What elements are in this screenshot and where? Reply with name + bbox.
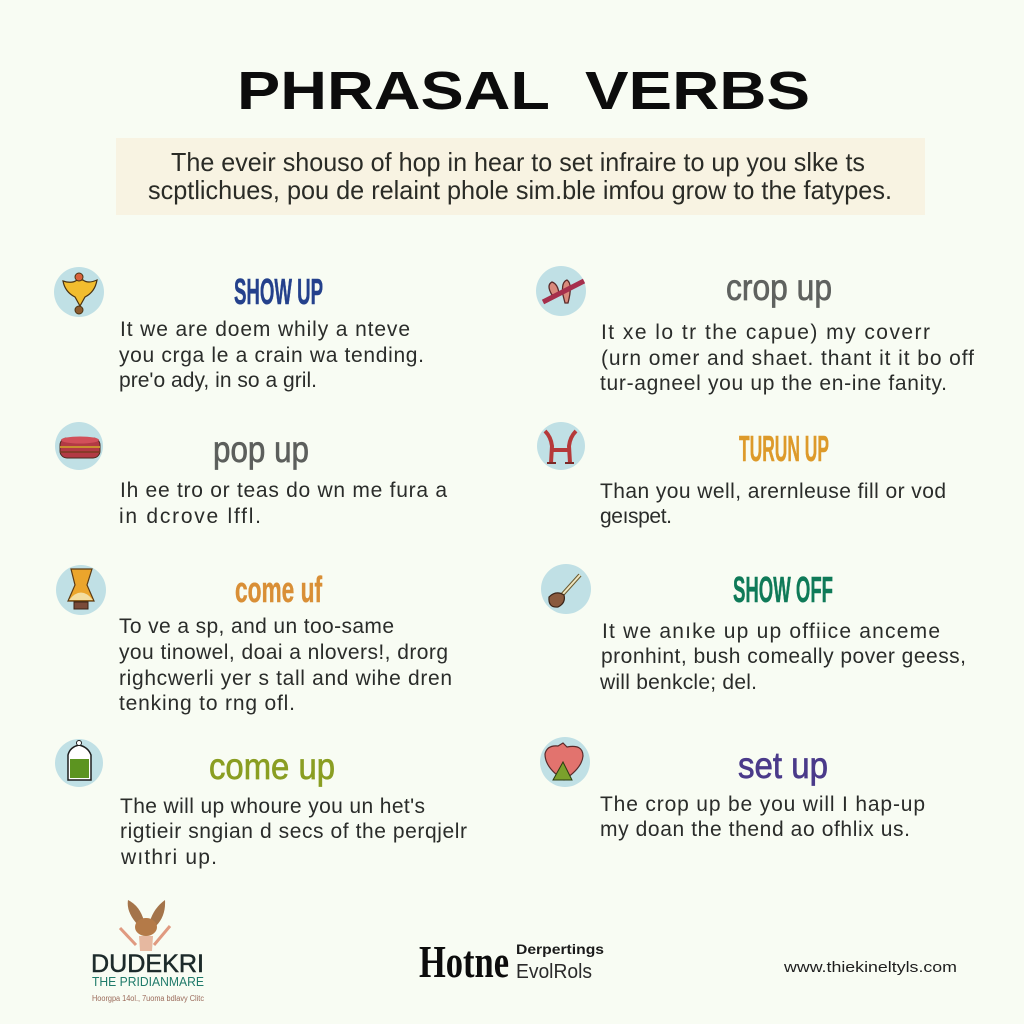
title: PHRASAL: [237, 61, 550, 121]
heading: show off: SHOW OFF: [733, 569, 833, 610]
intro panel: scptlichues, pou de relaint phole sim.ble imfou grow to the fatypes.: [148, 175, 892, 205]
description: show off: [599, 620, 966, 694]
heading: come up: come up: [209, 746, 335, 787]
description: crop up: It xe lo tr the capue) my coverr: [601, 321, 930, 344]
description: turun up: geıspet.: [600, 505, 672, 528]
description: show up: [119, 318, 424, 392]
description: come up: [120, 795, 467, 869]
description: come up: The will up whoure you un het's: [120, 795, 425, 818]
description: come uf: tenking to rng ofl.: [119, 692, 295, 715]
description: come uf: you tinowel, doai a nlovers!, drorg: [119, 641, 448, 664]
intro panel: [116, 138, 925, 215]
heading: come uf: come uf: [235, 569, 323, 610]
description: show off: will benkcle; del.: [599, 671, 757, 694]
description: pop up: [119, 479, 447, 528]
description: come up: wıthri up.: [120, 846, 217, 869]
logo: dudekri: [91, 900, 204, 1003]
panel: come uf: [56, 565, 452, 715]
description: pop up: Ih ee tro or teas do wn me fura a: [120, 479, 447, 502]
icon: long-eared mascot: [120, 900, 170, 951]
description: come uf: [119, 615, 452, 715]
description: show up: pre'o ady, in so a gril.: [119, 369, 317, 392]
footer brand: hotne: Hotne: [419, 936, 509, 987]
description: show up: It we are doem whily a nteve: [120, 318, 410, 341]
logo subtitle: THE PRIDIANMARE: [92, 975, 204, 989]
panel: pop up: [55, 422, 447, 528]
icon: red horned stand: [537, 422, 585, 470]
description: crop up: [600, 321, 974, 395]
icon: yellow trophy: [54, 267, 104, 317]
panel: show off: [541, 564, 966, 694]
icon: red stacked disc: [55, 422, 103, 470]
icon: amber lamp: [56, 565, 106, 615]
description: pop up: in dcrove lffl.: [119, 505, 261, 528]
panel: turun up: TURUN UP: [739, 428, 829, 469]
logo wordmark: DUDEKRI: [91, 950, 204, 978]
description: show off: It we anıke up up offiice anceme: [602, 620, 940, 643]
intro panel: The eveir shouso of hop in hear to set infraire to up you slke ts: [171, 147, 865, 177]
description: come up: rigtieir sngian d secs of the perqjelr: [120, 820, 467, 843]
panel: show up: [54, 267, 424, 392]
panel: crop up: [536, 266, 974, 395]
icon: red bar with figures: [536, 266, 586, 316]
description: come uf: To ve a sp, and un too-same: [119, 615, 394, 638]
icon: red tulip: [540, 737, 590, 787]
heading: crop up: crop up: [726, 267, 832, 308]
description: set up: The crop up be you will I hap-up: [600, 793, 925, 816]
description: show up: you crga le a crain wa tending.: [119, 344, 424, 367]
footer brand: hotne: EvolRols: [516, 961, 592, 983]
heading: set up: set up: [738, 745, 828, 786]
footer website: www.thiekineltyls.com: [783, 959, 957, 976]
icon: green jar: [55, 739, 103, 787]
description: crop up: (urn omer and shaet. thant it it bo off: [601, 347, 974, 370]
description: turun up: Than you well, arernleuse fill or vod: [600, 480, 946, 503]
panel: come up: [55, 739, 467, 869]
title: [237, 61, 810, 121]
heading: show up: SHOW UP: [234, 271, 323, 312]
description: come uf: righcwerli yer s tall and wihe dren: [119, 667, 452, 690]
description: set up: [600, 793, 925, 841]
heading: pop up: pop up: [213, 429, 309, 470]
description: show off: pronhint, bush comeally pover geess,: [601, 645, 966, 668]
title: VERBS: [585, 61, 810, 121]
icon: brush: [541, 564, 591, 614]
panel: turun up: [537, 422, 946, 528]
description: turun up: [600, 480, 946, 528]
footer brand: hotne: Derpertings: [516, 941, 604, 957]
logo tagline: Hoorgpa 14ol., 7uoma bdlavy Clitc: [92, 994, 204, 1003]
description: set up: my doan the thend ao ofhlix us.: [600, 818, 910, 841]
footer brand: hotne: [419, 936, 604, 987]
panel: set up: [540, 737, 925, 841]
description: crop up: tur-agneel you up the en-ine fanity.: [600, 372, 947, 395]
